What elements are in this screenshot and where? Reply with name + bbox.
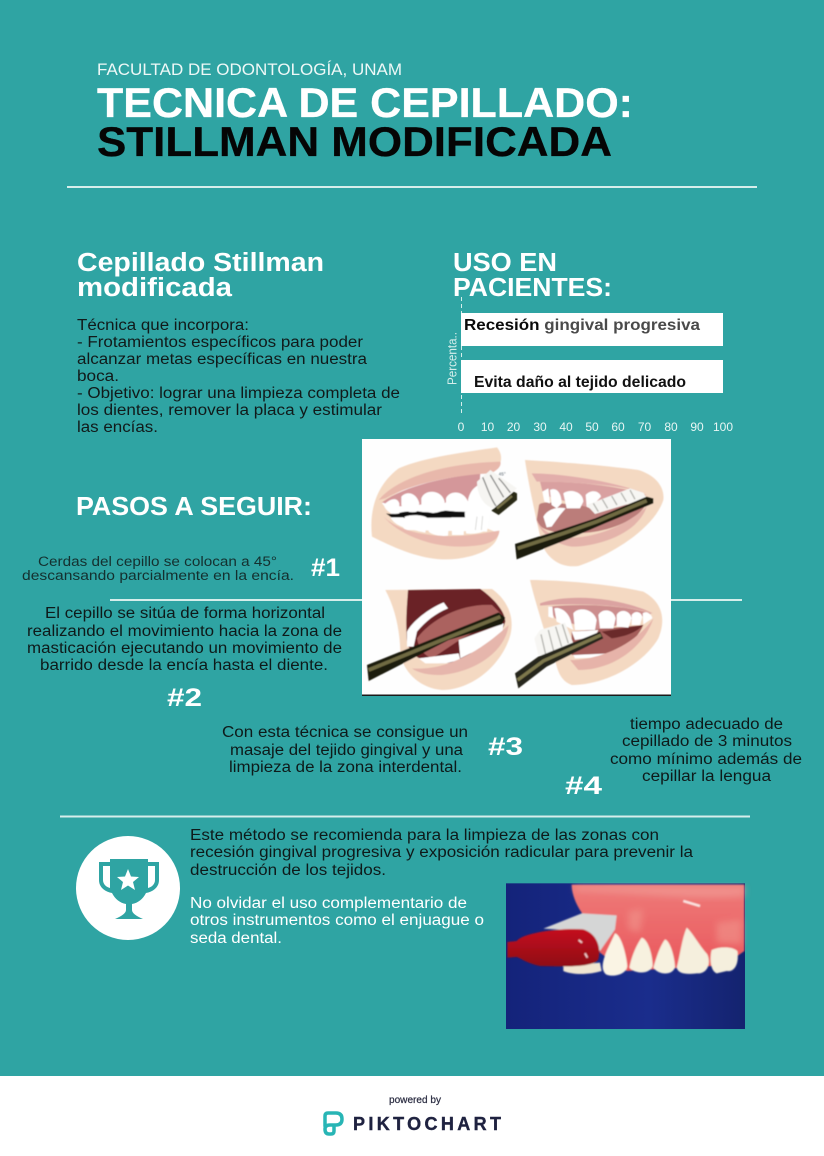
- description text: alcanzar metas específicas en nuestra: [77, 351, 367, 368]
- description text: - Frotamientos específicos para poder: [77, 334, 363, 351]
- bar: evita daño: [461, 360, 723, 393]
- icon: trophy badge: [76, 836, 180, 940]
- axis ticks: 80: [664, 420, 678, 434]
- step 3: [222, 724, 523, 776]
- faculty label: FACULTAD DE ODONTOLOGÍA, UNAM: [97, 60, 402, 79]
- step 4 text: cepillado de 3 minutos: [622, 733, 792, 750]
- panel: uso en pacientes: [444, 249, 733, 434]
- bar chart: [444, 297, 733, 434]
- panel: description: [77, 249, 400, 436]
- step 1 number: #1: [311, 554, 340, 582]
- bar: recesión gingival progresiva: Recesión gingival progresiva: [464, 317, 700, 334]
- step 2 text: El cepillo se sitúa de forma horizontal: [45, 605, 325, 622]
- description text: boca.: [77, 368, 119, 385]
- step 2 text: barrido desde la encía hasta el diente.: [40, 657, 328, 674]
- step 4 text: [610, 716, 802, 785]
- description text: los dientes, remover la placa y estimular: [77, 402, 382, 419]
- step 1 text: descansando parcialmente en la encía.: [22, 568, 294, 583]
- wordmark: PIKTOCHART: [353, 1114, 501, 1134]
- image: brushing illustration: [362, 439, 671, 696]
- recommendation text: destrucción de los tejidos.: [190, 862, 386, 879]
- axis ticks: 40: [559, 420, 573, 434]
- recommendation text: recesión gingival progresiva y exposición radicular para prevenir la: [190, 844, 693, 861]
- axis label: Percenta..: [444, 332, 460, 385]
- step 1: [22, 554, 340, 583]
- axis ticks: 90: [690, 420, 704, 434]
- mouth 4: [515, 580, 662, 688]
- axis ticks: 50: [585, 420, 599, 434]
- axis ticks: 100: [713, 420, 733, 434]
- title line 1: TECNICA DE CEPILLADO:: [97, 79, 633, 126]
- powered by label: powered by: [389, 1094, 442, 1106]
- heading: uso en pacientes: USO EN: [453, 249, 557, 277]
- axis ticks: 10: [481, 420, 494, 434]
- axis ticks: 20: [507, 420, 520, 434]
- step 2 number: #2: [167, 684, 202, 712]
- heading: pasos a seguir: PASOS A SEGUIR:: [76, 493, 312, 521]
- mouth 1: [371, 447, 517, 559]
- description text: [77, 317, 400, 436]
- recommendation text: Este método se recomienda para la limpieza de las zonas con: [190, 827, 659, 844]
- description text: Técnica que incorpora:: [77, 317, 249, 334]
- reminder text: otros instrumentos como el enjuague o: [190, 912, 484, 929]
- step 2 text: masticación ejecutando un movimiento de: [27, 640, 342, 657]
- icon: piktochart logo: [325, 1113, 342, 1134]
- step 3 text: masaje del tejido gingival y una: [230, 742, 463, 759]
- axis ticks: 70: [638, 420, 651, 434]
- heading: Cepillado Stillman modificada: [77, 249, 324, 302]
- step 3 number: #3: [488, 733, 523, 761]
- step 3 text: limpieza de la zona interdental.: [229, 759, 462, 776]
- reminder text: No olvidar el uso complementario de: [190, 895, 467, 912]
- heading: uso en pacientes: [453, 249, 612, 302]
- mouth 3: [367, 589, 512, 690]
- step 4 text: tiempo adecuado de: [630, 716, 783, 733]
- mouth 1: 45°: [499, 471, 506, 476]
- step 4 number: #4: [565, 772, 602, 800]
- step 3 text: [222, 724, 468, 776]
- step 4: [565, 716, 802, 800]
- heading: Cepillado Stillman modificada: modificada: [77, 274, 233, 302]
- reminder text: seda dental.: [190, 930, 282, 947]
- step 1 text: [22, 554, 294, 583]
- axis ticks: 0: [458, 420, 465, 434]
- title line 2: STILLMAN MODIFICADA: [97, 118, 612, 165]
- description text: - Objetivo: lograr una limpieza completa de: [77, 385, 400, 402]
- recommendation text: [190, 827, 693, 879]
- axis ticks: [458, 420, 733, 434]
- image: brushing photo: [506, 883, 745, 1029]
- description text: las encías.: [77, 419, 158, 436]
- step 2 text: realizando el movimiento hacia la zona de: [27, 623, 342, 640]
- heading: Cepillado Stillman modificada: Cepillado Stillman: [77, 249, 324, 277]
- step 2: [27, 605, 342, 712]
- step 2 text: [27, 605, 342, 674]
- heading: uso en pacientes: PACIENTES:: [453, 274, 612, 302]
- bar: evita daño: Evita daño al tejido delicado: [474, 374, 686, 391]
- step 4 text: como mínimo además de: [610, 751, 802, 768]
- reminder text: [190, 895, 484, 947]
- bar: recesión gingival progresiva: [461, 313, 723, 346]
- axis ticks: 30: [533, 420, 547, 434]
- footer: [0, 1076, 824, 1156]
- header: [97, 60, 633, 165]
- step 3 text: Con esta técnica se consigue un: [222, 724, 468, 741]
- axis ticks: 60: [611, 420, 625, 434]
- step 1 text: Cerdas del cepillo se colocan a 45°: [38, 554, 277, 569]
- step 4 text: cepillar la lengua: [642, 768, 771, 785]
- mouth 2: [515, 460, 664, 566]
